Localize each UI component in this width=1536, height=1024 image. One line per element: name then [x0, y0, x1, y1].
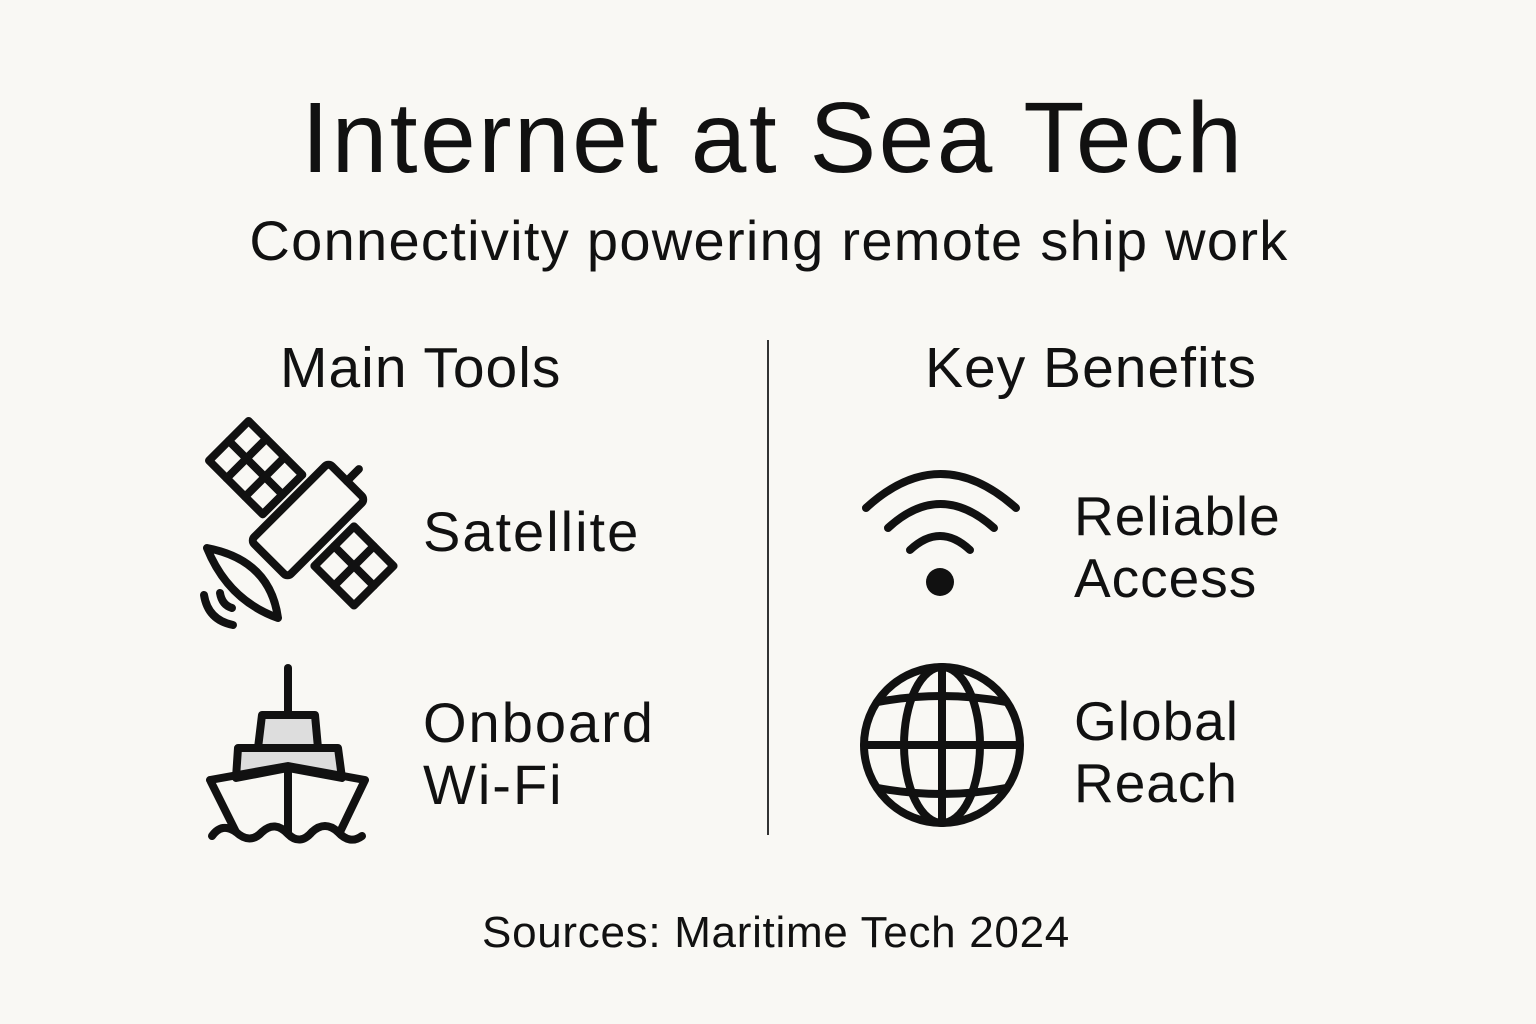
label: onboard wifi	[423, 691, 655, 816]
label: reliable access: Reliable	[1074, 485, 1281, 547]
heading: main tools: Main Tools	[280, 336, 561, 400]
label: global reach: Reach	[1074, 752, 1238, 814]
divider	[767, 340, 769, 835]
label: satellite: Satellite	[423, 500, 640, 563]
label: global reach	[1074, 690, 1239, 814]
title: Internet at Sea Tech	[301, 82, 1245, 194]
sources: Sources: Maritime Tech 2024	[482, 908, 1070, 957]
label: global reach: Global	[1074, 690, 1239, 752]
label: onboard wifi: Wi-Fi	[423, 753, 564, 816]
icon: globe	[864, 667, 1020, 823]
icon: wifi	[866, 474, 1016, 596]
label: onboard wifi: Onboard	[423, 691, 655, 754]
label: reliable access: Access	[1074, 547, 1257, 609]
subtitle: Connectivity powering remote ship work	[249, 209, 1289, 272]
icon: ship	[210, 668, 365, 840]
label: reliable access	[1074, 485, 1281, 609]
heading: key benefits: Key Benefits	[925, 336, 1257, 400]
icon: satellite	[190, 390, 425, 625]
